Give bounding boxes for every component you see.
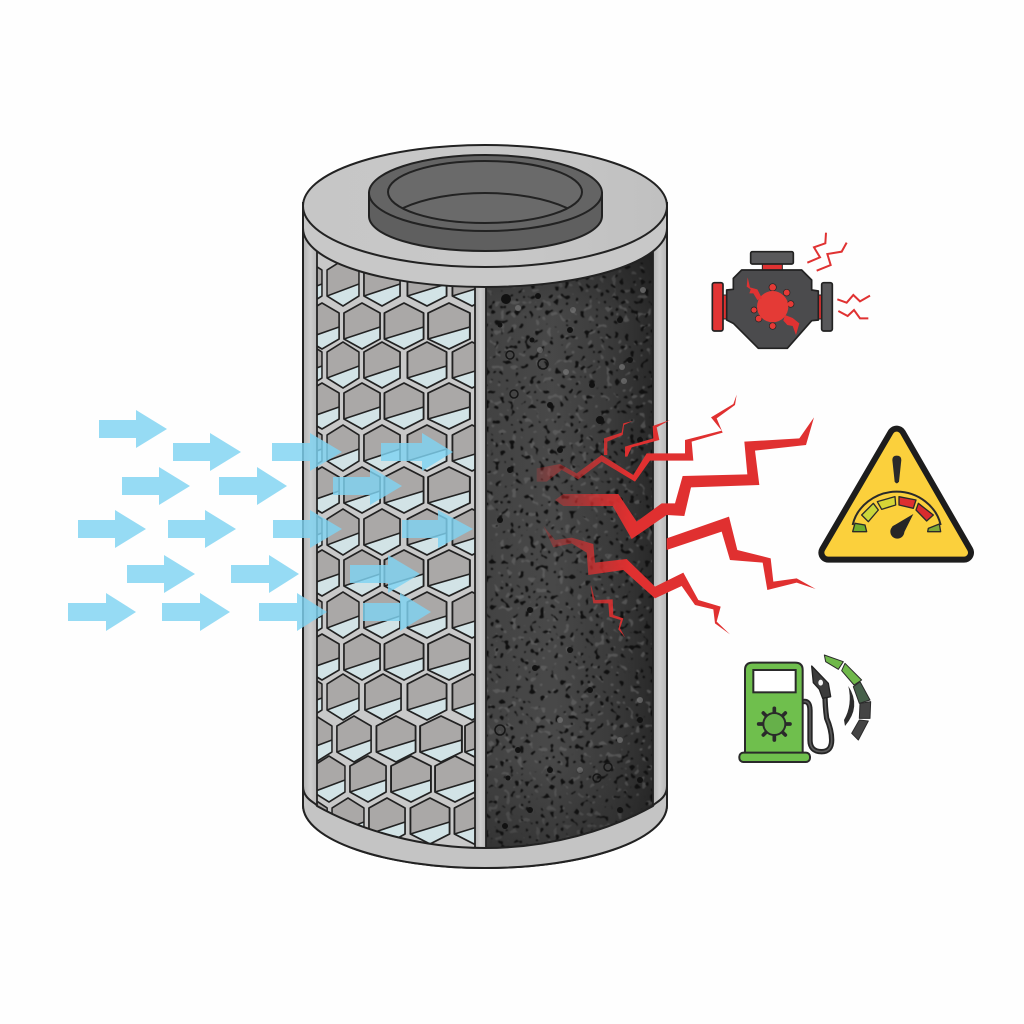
pump body [745, 663, 803, 753]
red damage cracks [537, 395, 816, 637]
icon: fuel pump with efficiency gauge [739, 655, 871, 762]
red left mount [712, 283, 723, 331]
icon: damaged engine [712, 233, 870, 348]
red gear [751, 284, 794, 329]
exclamation mark [892, 456, 901, 483]
pump nozzle [812, 666, 831, 698]
engine block [727, 270, 818, 348]
infographic: clogged cylindrical filter [68, 144, 974, 869]
grey right mount [822, 283, 832, 331]
filter cartridge [290, 145, 667, 868]
collar outer wall [369, 193, 602, 251]
collar opening [388, 161, 582, 223]
collar inner lip [403, 193, 567, 208]
inner divider lines [317, 230, 653, 848]
vibration zigzags [807, 233, 870, 318]
engine handle [751, 252, 793, 264]
engine top cap [762, 263, 782, 271]
gauge crescent [844, 686, 854, 726]
bottom end cap band [303, 786, 667, 868]
pump base [739, 753, 810, 762]
gauge needle [890, 514, 913, 539]
cylinder body shell [303, 203, 667, 868]
triangle fill [828, 436, 964, 553]
gauge segments [853, 497, 941, 532]
pump gear emblem [759, 708, 790, 740]
pump nozzle opening [818, 680, 823, 686]
top cap rim [303, 203, 667, 287]
triangle outline [828, 436, 964, 553]
pump hose [803, 693, 832, 752]
pump hose highlight [803, 693, 832, 752]
engine connectors [722, 295, 822, 319]
clean honeycomb mesh half [318, 264, 474, 845]
gauge segments [824, 655, 871, 740]
icon: warning triangle with gauge [828, 436, 964, 553]
gauge arc [853, 492, 941, 525]
pump display [753, 670, 796, 692]
clogged carbon half [486, 240, 653, 850]
side bars [304, 230, 666, 848]
collar top ring [369, 155, 602, 231]
airflow arrows [68, 410, 473, 631]
engine cracks [747, 277, 799, 335]
top cap face [303, 145, 667, 267]
